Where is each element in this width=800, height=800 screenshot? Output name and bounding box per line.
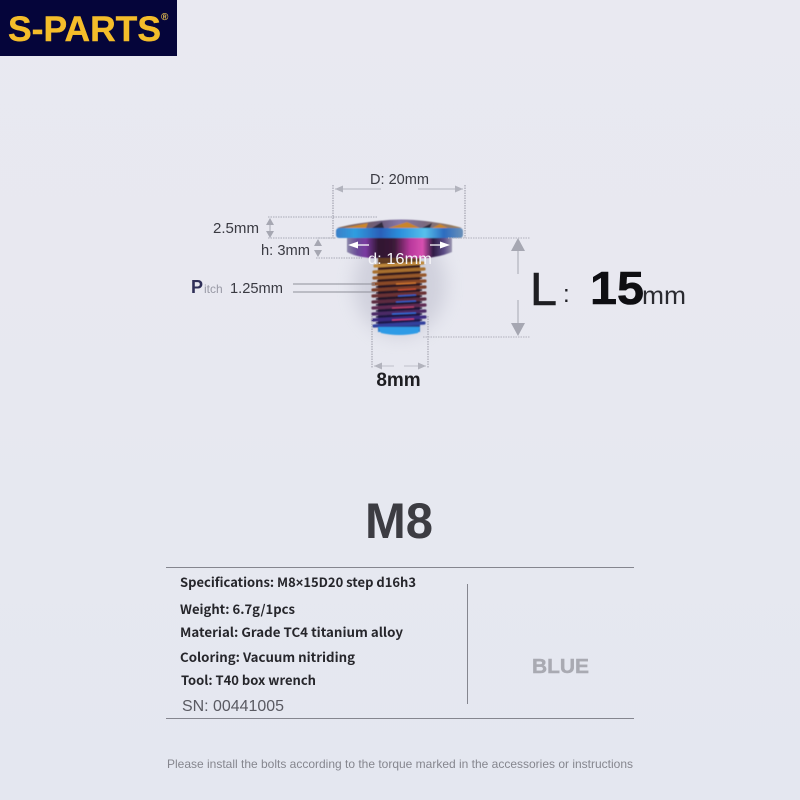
heading: M8: M8 bbox=[365, 493, 433, 549]
bolt head dome bbox=[337, 220, 462, 228]
spec list: Tool: T40 box wrench bbox=[181, 670, 316, 689]
dimension: head diameter D 20mm bbox=[333, 171, 465, 238]
logo: S-PARTS: ® bbox=[161, 12, 169, 23]
dimension: step diameter d 16mm: d: 16mm bbox=[368, 251, 432, 268]
bolt shaft with thread bbox=[373, 256, 425, 335]
dimension: head diameter D 20mm: D: 20mm bbox=[370, 171, 429, 188]
footer note: Please install the bolts according to the torque marked in the accessories or instructions bbox=[167, 757, 633, 771]
dimension: pitch 1.25mm: 1.25mm bbox=[230, 280, 283, 297]
color label: BLUE: BLUE bbox=[532, 656, 589, 678]
dimension: pitch 1.25mm bbox=[191, 277, 375, 297]
spec list: Weight: 6.7g/1pcs bbox=[180, 599, 295, 618]
dimension: step diameter d 16mm bbox=[348, 242, 450, 268]
dimension: thread diameter 8mm bbox=[372, 316, 428, 391]
bolt head step bbox=[347, 238, 452, 258]
dimension: length L 15mm: mm bbox=[642, 282, 686, 310]
dimension: length L 15mm bbox=[423, 238, 686, 337]
dimension: step height h 3mm: h: 3mm bbox=[261, 242, 310, 259]
bolt illustration bbox=[336, 220, 463, 335]
spec list: SN: 00441005 bbox=[182, 698, 284, 715]
logo: S-PARTS bbox=[0, 0, 177, 56]
dimension: head height 2.5mm: 2.5mm bbox=[213, 220, 259, 237]
logo: S-PARTS: S-PARTS bbox=[8, 10, 161, 49]
bolt shadow bbox=[354, 233, 446, 337]
dimension: length L 15mm: L bbox=[530, 263, 557, 315]
dimension: pitch 1.25mm: P bbox=[191, 277, 203, 297]
dimension: step height h 3mm bbox=[261, 238, 362, 259]
dimension: length L 15mm: : bbox=[563, 281, 570, 308]
spec list: Material: Grade TC4 titanium alloy bbox=[180, 622, 404, 641]
spec list: Specifications: M8×15D20 step d16h3 bbox=[180, 572, 416, 591]
dimension: pitch 1.25mm: itch bbox=[204, 282, 223, 296]
spec list bbox=[180, 572, 416, 715]
dimension: length L 15mm: 15 bbox=[590, 262, 644, 314]
bolt flange bbox=[336, 228, 463, 238]
spec list: Coloring: Vacuum nitriding bbox=[180, 647, 355, 666]
dimension: head height 2.5mm bbox=[213, 217, 378, 238]
dimension: thread diameter 8mm: 8mm bbox=[376, 370, 421, 391]
spec table rules bbox=[166, 568, 634, 718]
